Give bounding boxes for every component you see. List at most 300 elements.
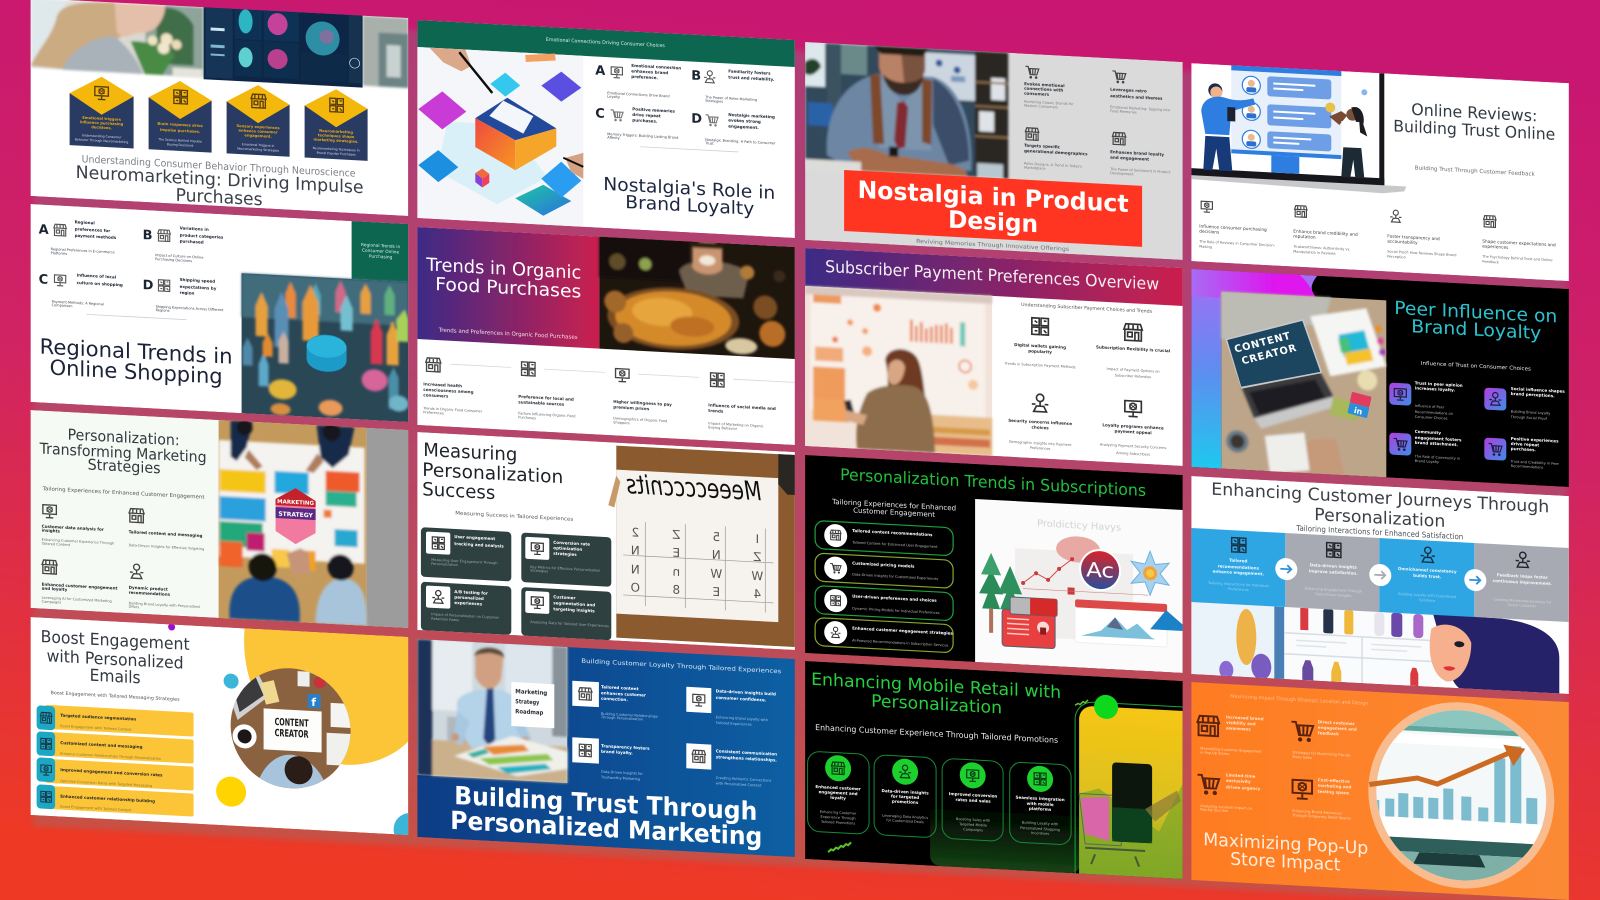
insight two: Through Social Proof (1510, 415, 1548, 421)
metric card one: Measuring User Engagement Through (431, 558, 498, 565)
journey step three (1398, 546, 1457, 604)
four gold and navy cards: Neuromarketing Techniques in (313, 146, 360, 152)
insight two (1484, 385, 1565, 422)
strategy three: and loyalty (42, 586, 68, 592)
step one: consciousness among (423, 387, 474, 394)
trust point four: with Personalized Content (716, 781, 762, 788)
insight four (1484, 435, 1559, 471)
preference four: Among Subscribers (1116, 451, 1150, 457)
Ac logo: Ac (1086, 557, 1114, 583)
title: Store Impact (1230, 850, 1340, 875)
benefit four: The Power of Sentiment in Product (1109, 167, 1171, 174)
title: Purchases (176, 186, 263, 210)
trust point three (572, 737, 650, 782)
title: Personalized Marketing (450, 806, 762, 851)
title: Brand Loyalty (625, 192, 755, 220)
preference three: choices (1032, 424, 1049, 430)
tactic one: visibility and (1226, 720, 1256, 726)
metric card three: Impact of Personalization on Customer (431, 612, 500, 620)
header text: Emotional Connections Driving Consumer Choices (546, 37, 665, 49)
preference three (1008, 393, 1072, 452)
title: Personalization (871, 691, 1002, 718)
insight four: Recommendations (1511, 464, 1544, 470)
benefit column three: Campaigns (963, 827, 983, 832)
gradient corner shape (1191, 269, 1317, 474)
takeaway C: C (39, 272, 48, 288)
tactic two: engagement and (1318, 725, 1357, 732)
takeaway A (38, 220, 116, 255)
slide: Enhancing Customer Journeys (1191, 476, 1569, 697)
title (425, 254, 581, 303)
step two: Preference for local and (518, 394, 574, 402)
photo: handwritten notebook on wood: 5 (712, 530, 720, 544)
trust point two: Enhancing Brand Loyalty with (716, 715, 768, 722)
title: Transforming Marketing (39, 439, 207, 466)
step one (422, 358, 511, 419)
subtitle: Building Trust Through Customer Feedback (1415, 165, 1536, 178)
trust point one: Through Personalization (600, 715, 643, 721)
review point two: Trustworthiness: Authenticity vs. (1292, 244, 1350, 252)
trust point four: Consistent communication (716, 748, 777, 757)
journey step one: Preferences (1228, 587, 1249, 592)
insight one: Trust in peer opinion (1415, 380, 1463, 388)
trust point four: strengthens relationships. (716, 754, 777, 763)
benefit four: Enhances brand loyalty (1110, 149, 1164, 157)
title: Subscriber Payment Preferences Overview (825, 257, 1159, 294)
metric card three: experiences (454, 600, 483, 606)
journey step three: Building Loyalty with Customized (1398, 592, 1456, 599)
tactic four: Through Temporary Retail Spaces (1291, 813, 1351, 821)
benefit column four: Incentives (1031, 831, 1049, 836)
strategy two: Data-Driven Insights for Effective Targeting (129, 543, 204, 551)
preference one (1004, 316, 1076, 369)
trust point two (686, 687, 776, 728)
four gold and navy cards: Understanding Consumer (82, 133, 122, 139)
subtitle: Understanding Subscriber Payment Choices and Trends (1021, 302, 1153, 315)
metric card two: Key Metrics for Effective Personalization (530, 565, 600, 573)
journey band (1191, 528, 1569, 622)
slide: Personalization Transforming Marketing (31, 407, 409, 628)
takeaway A: Emotional connection (631, 63, 681, 71)
benefit one (1024, 66, 1074, 110)
feature pill one (815, 521, 953, 556)
journey step two (1305, 541, 1362, 599)
metric card four (521, 587, 611, 640)
strategy one (41, 505, 114, 549)
review point four (1481, 215, 1556, 267)
strategy three: Leveraging AI for Customized Marketing (42, 596, 112, 603)
takeaway A: payment methods (75, 233, 117, 240)
teal dot (224, 673, 239, 689)
photo: man over feast (599, 235, 795, 359)
feature pill four: AI-Powered Recommendations in Subscription Services (852, 638, 949, 648)
journey step four: continuous improvement. (1493, 578, 1552, 586)
step three: premium prices (613, 404, 650, 411)
benefit four: and engagement (1110, 155, 1149, 162)
four gold and navy cards: impulse purchases. (160, 128, 201, 134)
title (1203, 830, 1368, 877)
benefit column two: for Customized Deals (886, 818, 924, 824)
takeaway B: trust and reliability. (728, 75, 775, 82)
slide: Measuring Personalization Success (417, 432, 795, 650)
strategy three (42, 560, 117, 608)
subtitle (831, 498, 956, 520)
red title band (844, 170, 1142, 247)
preference three: Security concerns influence (1008, 418, 1072, 426)
preference two: Subscriber Retention (1115, 373, 1151, 379)
takeaway B: Impact of Culture on Online (155, 253, 203, 260)
arrow two (1369, 563, 1391, 587)
step two: Factors Influencing Organic Food (518, 411, 576, 418)
list row four (37, 784, 194, 817)
title: Emails (90, 666, 141, 687)
takeaway D: evokes strong (728, 118, 761, 124)
photo: handwritten notebook on wood (608, 445, 795, 647)
journey step one (1207, 536, 1269, 593)
insight two: Social influence shapes (1511, 386, 1565, 394)
four gold and navy cards: influence purchasing (80, 120, 124, 126)
takeaway C: Memory Triggers: Building Lasting Brand (607, 132, 678, 140)
list row two: Customized content and messaging (60, 740, 143, 749)
takeaway D: Nostalgic Branding: A Path to Consumer (705, 138, 776, 146)
takeaway A: Emotional Connections Drive Brand (607, 91, 670, 98)
insight three (1389, 428, 1462, 465)
benefit one: Modern Consumers (1024, 104, 1058, 109)
slide: Trends in Organic Food Purchases (417, 225, 795, 445)
list row three: Improved engagement and conversion rates (60, 767, 163, 778)
four gold and navy cards: The Science Behind Impulse (157, 137, 202, 144)
green corner box (352, 221, 409, 282)
benefit column four: Seamless integration (1016, 795, 1065, 802)
review point three (1387, 210, 1457, 262)
strategy one: Tailored Content (41, 542, 71, 547)
list row four: Enhanced customer relationship building (60, 794, 155, 804)
benefit column four: platforms (1029, 806, 1052, 812)
title: Food Purchases (435, 274, 581, 303)
step two: Purchases (518, 415, 536, 420)
strategy three: Enhanced customer engagement (42, 582, 117, 591)
review point four: Shape customer expectations and (1482, 239, 1556, 248)
review point one: Influence consumer purchasing (1199, 224, 1267, 233)
title: Enhancing Mobile Retail with (811, 670, 1061, 703)
circular chart photo (1368, 697, 1554, 893)
green dot (1094, 694, 1118, 720)
step three: Demographics of Organic Food (613, 416, 667, 423)
photo: content creator desk: in (1353, 406, 1364, 417)
metric card two (521, 533, 611, 587)
title: Boost Engagement (41, 627, 190, 654)
insight two: Building Brand Loyalty (1511, 409, 1550, 416)
journey step three: builds trust. (1413, 573, 1442, 579)
four gold and navy cards: techniques shape (318, 133, 355, 139)
metric card three (421, 582, 511, 635)
preference two (1096, 322, 1171, 380)
trust point two: consumer confidence. (716, 695, 767, 703)
metric card four: Analyzing Data for Tailored User Experiences (530, 620, 609, 628)
title (811, 670, 1061, 722)
subtitle: Influence of Trust on Consumer Choices (1421, 361, 1531, 373)
step one: Trends in Organic Food Consumer (422, 406, 483, 413)
subtitle: Maximizing Impact Through Strategic Location and Design (1230, 694, 1368, 707)
tactic one: Increased brand (1226, 714, 1264, 721)
takeaway D: D (143, 278, 154, 294)
strategy two: Tailored content and messaging (129, 529, 202, 538)
takeaway B: Strategies (705, 99, 723, 104)
title: Maximizing Pop-Up (1203, 830, 1368, 859)
title (450, 781, 762, 851)
corner text: Consumer Online (362, 248, 400, 256)
four gold and navy cards: Sensory experiences (237, 124, 280, 130)
takeaway D: Trust (704, 141, 714, 146)
benefit column three: Boosting Sales with (956, 817, 990, 823)
benefit three: generational demographics (1024, 148, 1088, 156)
slide: Nostalgia in Product Design (805, 42, 1183, 260)
slide: Online Reviews (1191, 61, 1569, 281)
trust point one: Tailored content (601, 684, 639, 691)
title (39, 424, 207, 480)
tactic two: Strategies for Maximizing Pop-Up (1292, 750, 1351, 758)
review point three: Perception (1387, 255, 1406, 260)
white illustration panel (975, 499, 1183, 673)
list row one (37, 704, 194, 738)
photo: isometric cards and box (417, 46, 583, 227)
journey step one: Tailoring Interactions for Individual (1207, 581, 1269, 588)
tactic two (1291, 718, 1357, 762)
insight one (1389, 379, 1463, 421)
metric card four: Customer (553, 594, 575, 600)
photo: handwritten notebook on wood: O (631, 580, 640, 595)
benefit column one: Tailored Promotions (820, 820, 855, 826)
yellow blob (244, 628, 409, 768)
strategy three: Campaigns (42, 600, 61, 605)
feature pill three: User-driven preferences and choices (852, 593, 937, 603)
metric card two: Strategies (530, 569, 548, 573)
metric card one: User engagement (454, 534, 495, 541)
text: Proldicticy Havys: Proldicticy Havys (1037, 518, 1121, 534)
photo: handwritten notebook on wood: 2 (631, 525, 639, 540)
benefit column one: engagement and (819, 789, 858, 796)
list row two: Enhance Customer Relationships Through Personalization (60, 752, 161, 761)
title: with Personalized (47, 646, 184, 673)
title (40, 334, 233, 389)
metric card one (421, 527, 511, 581)
journey step one: Tailored (1229, 558, 1248, 564)
slide: Maximizing Pop-Up Store Impact (1191, 682, 1569, 900)
benefit column four (1010, 762, 1071, 845)
takeaway B (144, 226, 224, 262)
title: Strategies (88, 456, 161, 477)
metric card two: Conversion rate (553, 540, 590, 547)
title: Trends in Organic (425, 254, 581, 284)
title (1211, 480, 1549, 538)
title: Peer Influence on (1394, 298, 1557, 327)
title: Building Trust Online (1393, 116, 1555, 144)
benefit column one: loyalty (830, 795, 846, 801)
insight three: engagement fosters (1415, 435, 1462, 442)
list row three (37, 757, 194, 791)
title: Design (948, 206, 1038, 238)
title: Personalization (422, 460, 563, 488)
illustration: laptop with review cards (1191, 61, 1406, 195)
title (1394, 298, 1557, 345)
slide: Building Trust Through Personalized Marketing (417, 639, 795, 857)
trust point one: Building Customer Relationships (601, 712, 658, 719)
insight three: The Role of Community in (1414, 454, 1460, 461)
slide: Enhancing Mobile Retail (805, 661, 1183, 879)
journey step two: Enhancing Engagement Through (1305, 587, 1362, 594)
feature pill four: Enhanced customer engagement strategies (852, 625, 953, 636)
slide: Personalization Trends in Subscriptions (805, 455, 1183, 673)
benefit column one: Enhanced customer (815, 784, 861, 791)
photo: content creator desk: CONTENT (1233, 331, 1292, 356)
journey step four: Creating Memorable Journeys for (1493, 598, 1552, 605)
step four: Buying Behavior (708, 425, 738, 431)
takeaway C: Comparison (52, 303, 73, 308)
title: Neuromarketing: Driving Impulse (76, 163, 364, 198)
takeaway C: C (595, 106, 605, 122)
circular photo: content creator flat lay (226, 662, 357, 794)
review point one: Making (1199, 245, 1212, 249)
insight one: Consumer Choices (1415, 415, 1448, 421)
step four (708, 373, 795, 434)
takeaway A: Regional Preferences in E-commerce (51, 247, 115, 254)
green header band (417, 20, 795, 67)
tactic three: Pop-Up Success (1200, 808, 1228, 813)
trust point four: Creating Authentic Connections (716, 776, 772, 783)
takeaway C: drive repeat (632, 112, 661, 118)
takeaway C: purchases. (632, 117, 658, 124)
title: Nostalgia's Role in (603, 174, 775, 204)
journey step one: recommendations (1218, 563, 1260, 571)
photo: thoughtful man at desk (805, 42, 1008, 181)
takeaway C (596, 107, 678, 140)
trust point one: connection. (601, 696, 628, 702)
insight three: Community (1415, 429, 1441, 435)
takeaway D (692, 113, 776, 145)
subtitle: Trends and Preferences in Organic Food Purchases (438, 328, 578, 341)
takeaway A: Loyalty (607, 95, 620, 99)
takeaway A: Regional (75, 219, 95, 225)
title (422, 440, 563, 508)
subtitle: Building Customer Loyalty Through Tailored Experiences (581, 658, 781, 675)
four gold and navy cards: Neuromarketing Strategies (237, 146, 279, 153)
takeaway C: Affinity (607, 136, 620, 140)
benefit column one: Enhancing Customer (820, 810, 857, 816)
title: Building Trust Through (454, 781, 757, 826)
benefit two: aesthetics and themes (1110, 93, 1163, 101)
feature pill three: Dynamic Pricing Models for Individual Preferences (852, 606, 940, 615)
journey step two: improve satisfaction. (1309, 568, 1358, 576)
photo: presenter with strategy roadmap: Strategy (515, 698, 539, 706)
title (605, 176, 774, 218)
preference four: Analyzing Payment Security Concerns (1100, 443, 1166, 450)
four gold and navy cards: Emotional triggers (82, 116, 122, 122)
benefit column two (874, 755, 936, 838)
metric card three: A/B testing for (454, 589, 488, 596)
tactic three: drives urgency (1226, 784, 1261, 791)
strategy one: Customer data analysis for (42, 524, 104, 532)
title: Measuring (423, 440, 517, 466)
four gold and navy cards: Buying Decisions (167, 142, 194, 148)
title (41, 627, 190, 690)
slide: Neuromarketing (31, 0, 409, 218)
benefit column two: Data-driven insights (882, 788, 929, 796)
tactic one: awareness (1226, 725, 1251, 732)
benefit two (1110, 71, 1170, 116)
photo: handwritten notebook on wood: E (713, 585, 720, 599)
takeaway A: A (595, 63, 605, 79)
preference four (1100, 399, 1166, 458)
benefit three: Targets specific (1024, 143, 1061, 150)
benefit two: Leverages retro (1110, 87, 1147, 94)
photo: handwritten notebook on wood: N (631, 562, 640, 577)
preference two: Impact of Payment Options on (1107, 367, 1160, 374)
step four: trends (708, 408, 724, 414)
takeaway C: culture on shopping (77, 280, 123, 287)
insight one: increases loyalty. (1415, 385, 1455, 393)
takeaway C: Influence of local (77, 272, 117, 280)
photo: handwritten notebook on wood: W (710, 567, 722, 581)
four gold and navy cards (70, 75, 368, 161)
step three (613, 368, 699, 429)
feature pill two: Customized pricing models (852, 560, 915, 569)
step four: Impact of Marketing on Organic (708, 421, 764, 428)
journey step two: Data-driven insights (1310, 562, 1357, 570)
trust point one (572, 681, 658, 722)
photo: handwritten notebook on wood: 4 (753, 587, 761, 601)
title: Online Reviews: (1411, 100, 1537, 125)
review point three: Social Proof: How Reviews Shape Brand (1387, 250, 1457, 257)
list row three: Optimize Conversion Rates with Targeted Messaging (60, 779, 152, 788)
preference three: Demographic Insights into Payment (1009, 440, 1072, 447)
photo: presenter with strategy roadmap (417, 639, 567, 783)
benefit four (1109, 132, 1171, 178)
slide: Peer Influence on Brand Loyalty (1191, 269, 1569, 490)
takeaway A: preference. (631, 74, 658, 80)
takeaway D: Nostalgic marketing (728, 112, 775, 119)
benefit one: connections with (1024, 86, 1063, 93)
strategy four: Building Brand Loyalty with Personalized (129, 601, 200, 609)
circular photo: content creator flat lay: CONTENT (275, 717, 309, 730)
takeaway A: preferences for (75, 226, 110, 233)
feature pill two (815, 553, 953, 588)
review point three: Foster transparency and (1387, 234, 1440, 242)
list row two (37, 731, 194, 764)
subtitle: Enhancing Customer Experience Through Tailored Promotions (815, 723, 1058, 745)
photo: presenter with strategy roadmap: Marketing (515, 688, 547, 697)
title (1394, 103, 1554, 140)
four gold and navy cards: engagement. (244, 133, 272, 139)
metric card three: Retention Rates (431, 617, 459, 622)
takeaway D: engagement. (728, 124, 759, 130)
subtitle: Boost Engagement with Tailored Messaging Strategies (51, 690, 180, 703)
takeaway B: Purchasing Decisions (155, 257, 192, 263)
feature pill one: Tailored content recommendations (852, 528, 933, 537)
journey step four: Every Customer (1508, 603, 1537, 608)
title: Success (422, 479, 495, 504)
photo: content creator desk (1221, 292, 1386, 480)
preference one: Trends in Subscription Payment Methods (1004, 361, 1076, 369)
title: Enhancing Customer Journeys Through (1211, 480, 1549, 518)
takeaway D: Regions (156, 308, 170, 313)
benefit column two: promotions (892, 799, 919, 805)
four gold and navy cards: Emotional Triggers in (242, 142, 274, 148)
preference four: payment appeal (1115, 428, 1152, 435)
takeaway B: Familiarity fosters (728, 69, 771, 76)
preference four: Loyalty programs enhance (1102, 422, 1164, 430)
review point two: Manipulation in Reviews (1293, 250, 1336, 256)
subtitle: Tailoring Interactions for Enhanced Satisfaction (1295, 524, 1463, 541)
